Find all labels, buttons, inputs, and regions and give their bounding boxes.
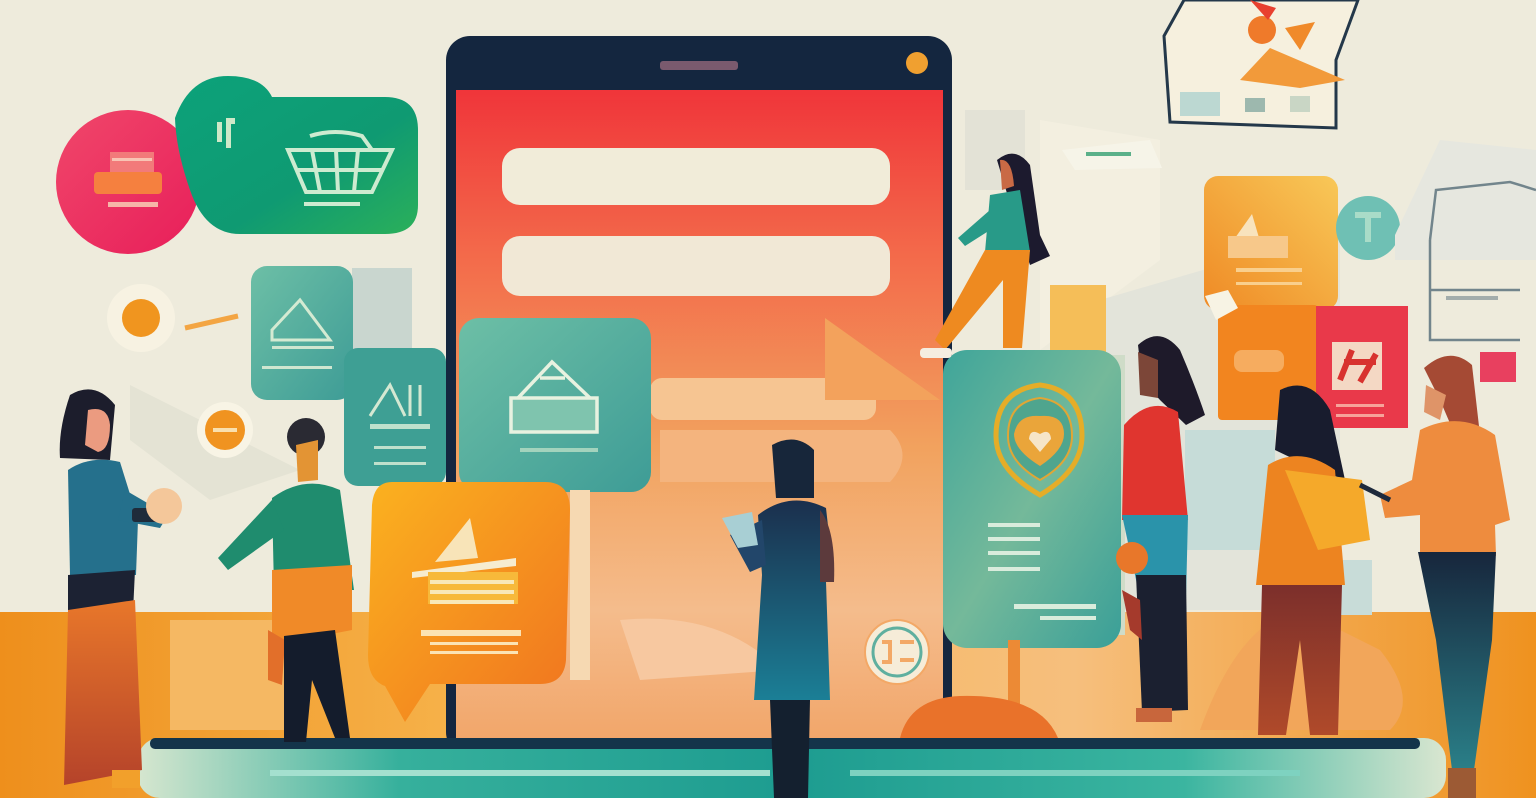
phone body bbox=[446, 36, 952, 756]
person: central woman with tablet from behind bbox=[722, 440, 834, 798]
icon: location pin bbox=[996, 385, 1082, 495]
orange stand with pole bbox=[900, 640, 1058, 738]
faint triangle bbox=[825, 318, 940, 400]
input field bbox=[502, 236, 890, 296]
phone speaker bbox=[660, 61, 738, 70]
icon: orange dot bbox=[107, 284, 238, 352]
top right product image bbox=[1164, 0, 1358, 128]
far right window sketch bbox=[1395, 140, 1536, 382]
panel: orange card right bbox=[1204, 176, 1338, 310]
person: woman in orange with folder bbox=[1256, 386, 1370, 735]
person: man with green shirt bbox=[218, 418, 354, 742]
icon: orange pill dot bbox=[197, 402, 253, 458]
small green label bbox=[1062, 140, 1162, 170]
panel: orange card right lower bbox=[1205, 290, 1318, 420]
person: left woman with tablet bbox=[60, 389, 182, 788]
phone bbox=[446, 36, 952, 756]
icon: box bbox=[511, 362, 597, 432]
panel: green small card bbox=[251, 266, 412, 400]
input field bbox=[502, 148, 890, 205]
panel: teal card left bbox=[344, 348, 446, 486]
floor bbox=[0, 612, 1536, 798]
icon: receipt bbox=[94, 152, 162, 207]
faint background shapes bbox=[130, 110, 1403, 730]
faint bubble bbox=[660, 430, 902, 482]
background wall bbox=[0, 0, 1536, 614]
panel: orange chat bubble bbox=[368, 482, 590, 722]
panel: teal phone card bbox=[459, 318, 651, 492]
panel: big teal card bbox=[943, 350, 1125, 648]
panel: green cart badge bbox=[175, 76, 418, 234]
panel: red card right bbox=[1316, 306, 1408, 428]
icon: box bbox=[412, 518, 518, 604]
base of phone stand bbox=[138, 738, 1446, 798]
person: top standing woman bbox=[920, 154, 1050, 358]
icon: music note bbox=[217, 118, 235, 148]
teal circle badge bbox=[1336, 196, 1400, 260]
phone camera bbox=[906, 52, 928, 74]
phone screen bbox=[456, 90, 943, 740]
icon: shopping cart bbox=[288, 132, 392, 204]
icon: round badge bbox=[865, 620, 929, 684]
panel: pink circle badge bbox=[56, 110, 200, 254]
faint bar bbox=[650, 378, 876, 420]
person: woman in red bbox=[1116, 336, 1205, 722]
person: right woman in orange bbox=[1360, 356, 1510, 798]
